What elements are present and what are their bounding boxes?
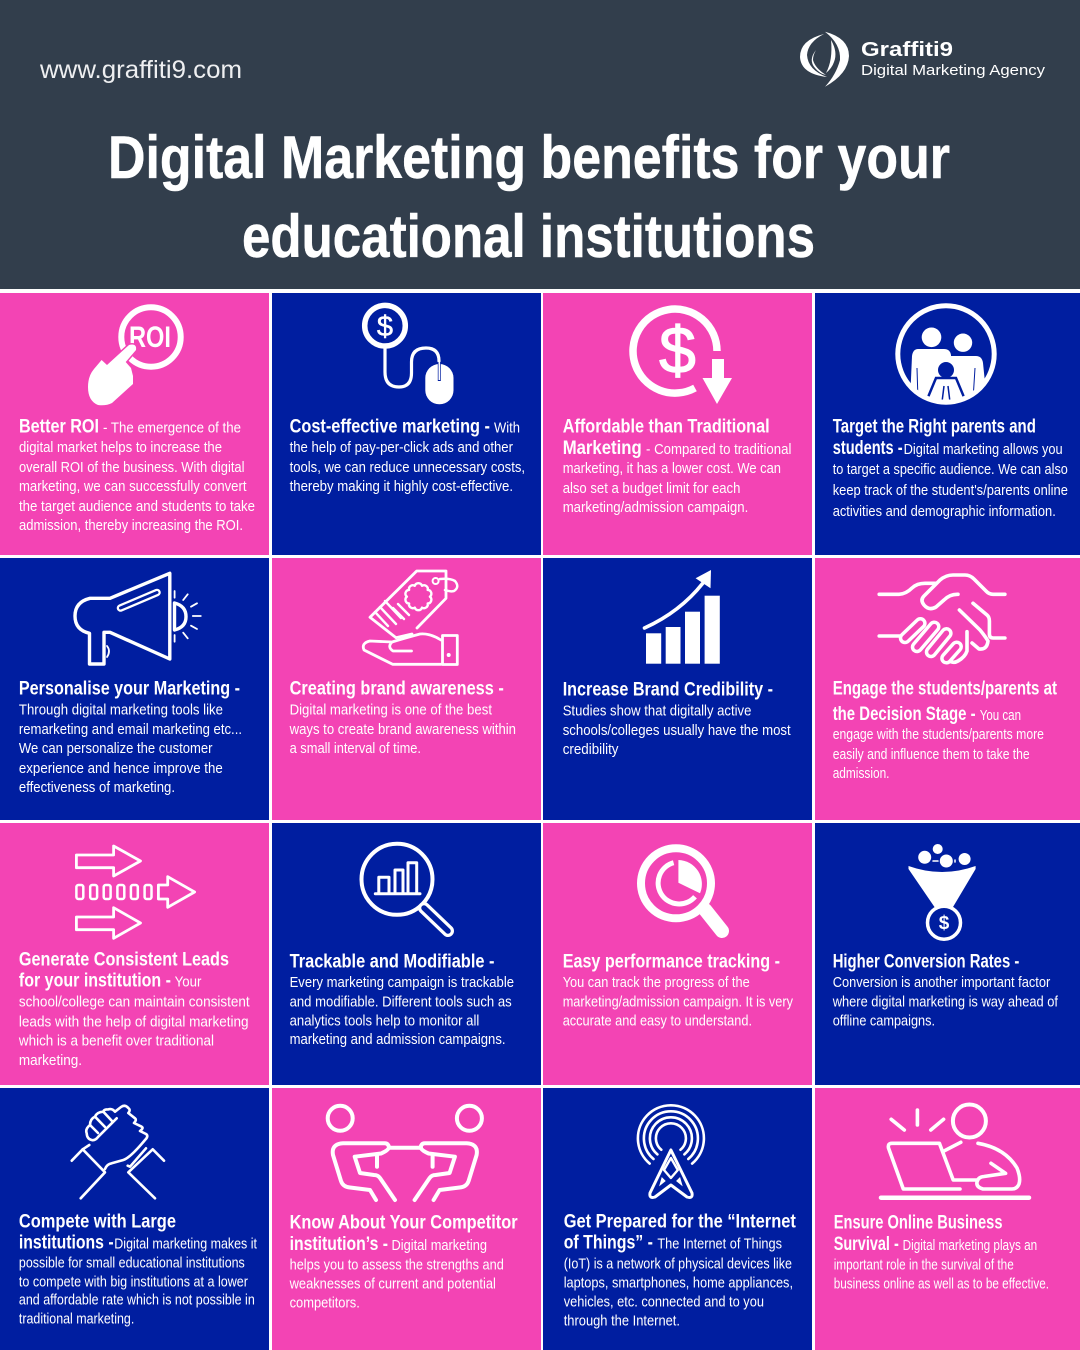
icon: funnel with dollar coin	[908, 844, 976, 939]
body text: Conversion is another important factor	[833, 974, 1050, 991]
heading: Easy performance tracking -	[563, 951, 780, 973]
panel: Easy performance tracking	[543, 823, 812, 1085]
panel: Creating brand awareness	[272, 558, 541, 820]
body text: to compete with big institutions at a lower	[19, 1274, 248, 1291]
icon: two people at table	[328, 1106, 482, 1200]
body text: Through digital marketing tools like	[19, 701, 223, 718]
body text	[563, 441, 791, 516]
body text: thereby making it highly cost-effective.	[290, 478, 513, 495]
icon: megaphone	[75, 573, 201, 664]
body text: You can track the progress of the	[563, 974, 750, 991]
icon: family in circle	[898, 306, 994, 402]
heading: Higher Conversion Rates -	[833, 951, 1019, 973]
icon: price tag on hand	[363, 571, 457, 664]
icon: dollar with down arrow: $	[659, 313, 696, 387]
body text	[833, 441, 1068, 520]
heading: Increase Brand Credibility -	[563, 679, 773, 701]
body text	[833, 707, 1044, 782]
heading	[563, 416, 770, 459]
icon: magnifier over bars	[362, 844, 448, 931]
body text: laptops, smartphones, home appliances,	[564, 1274, 793, 1291]
panel: Increase Brand Credibility	[543, 558, 812, 820]
body text: Digital marketing plays an	[903, 1237, 1037, 1254]
panel: Engage the students/parents	[815, 558, 1080, 820]
heading: Better ROI	[19, 416, 99, 438]
heading: institutions -	[19, 1231, 114, 1253]
icon: dollar coin and mouse: $	[377, 311, 393, 343]
title: educational institutions	[242, 203, 815, 270]
icon: dollar coin and mouse	[365, 305, 454, 404]
panel: Personalise your Marketing	[0, 558, 269, 820]
heading: Cost-effective marketing -	[290, 416, 490, 438]
header band	[0, 0, 1080, 289]
heading: Survival -	[834, 1233, 899, 1255]
icon: ROI click	[88, 307, 181, 405]
body text: - The emergence of the	[103, 420, 241, 436]
body text: school/college can maintain consistent	[19, 994, 250, 1011]
body text: ways to create brand awareness within	[289, 721, 516, 738]
body text: and modifiable. Different tools such as	[290, 994, 512, 1011]
body text	[18, 974, 250, 1069]
body text	[834, 1237, 1049, 1292]
body text: leads with the help of digital marketing	[19, 1014, 249, 1031]
body text	[19, 420, 255, 534]
panel: Ensure Online Business Survival	[815, 1088, 1080, 1350]
body text: remarketing and email marketing etc...	[19, 721, 242, 738]
body text	[19, 701, 242, 796]
heading: the Decision Stage -	[833, 703, 976, 725]
heading: institution’s -	[290, 1233, 388, 1255]
body text: marketing/admission campaign. It is very	[563, 994, 793, 1011]
body text: which is a benefit over traditional	[18, 1033, 214, 1050]
body text: admission, thereby increasing the ROI.	[19, 517, 243, 534]
body text	[19, 1235, 258, 1327]
body text	[563, 703, 791, 758]
body text: weaknesses of current and potential	[289, 1275, 496, 1292]
panel: Higher Conversion Rates	[815, 823, 1080, 1085]
body text: offline campaigns.	[833, 1013, 935, 1030]
body text: Digital marketing is one of the best	[290, 701, 493, 718]
body text: (IoT) is a network of physical devices like	[564, 1255, 792, 1272]
icon: ROI click: ROI	[129, 321, 171, 354]
body text: admission.	[833, 765, 890, 782]
body text	[289, 1237, 504, 1311]
body text: We can personalize the customer	[19, 740, 213, 757]
body text: experience and hence improve the	[19, 760, 223, 777]
logo: Graffiti9: Graffiti9	[861, 39, 953, 61]
body text: a small interval of time.	[290, 740, 421, 757]
heading	[19, 1211, 176, 1253]
icon: arm wrestling hands	[72, 1106, 164, 1198]
panel: Know About Your Competitor	[272, 1088, 541, 1350]
body text: Studies show that digitally active	[563, 703, 751, 720]
panel: Better ROI	[0, 293, 269, 555]
heading: of Things” -	[564, 1231, 653, 1253]
panel: Cost-effective marketing	[272, 293, 541, 555]
panel: Affordable than Traditional Marketing	[543, 293, 812, 555]
title	[108, 124, 950, 270]
body text: easily and influence them to take the	[833, 746, 1030, 763]
body text	[289, 701, 516, 757]
heading: Know About Your Competitor	[290, 1211, 518, 1233]
icon: dollar with down arrow	[633, 309, 732, 404]
body text: Every marketing campaign is trackable	[290, 974, 514, 991]
body text	[563, 974, 793, 1030]
body text: You can	[980, 707, 1021, 724]
heading	[290, 1211, 518, 1255]
icon: signal tower	[638, 1105, 704, 1198]
panel: Trackable and Modifiable	[272, 823, 541, 1085]
heading	[564, 1211, 796, 1253]
icon: magnifier over pie chart	[641, 848, 722, 931]
heading: Personalise your Marketing -	[19, 677, 240, 699]
body text: important role in the survival of the	[834, 1256, 1014, 1273]
heading	[834, 1211, 1003, 1255]
heading	[833, 677, 1057, 725]
body text: marketing.	[19, 1052, 82, 1069]
panel: Target the Right parents and students	[815, 293, 1080, 555]
body text: marketing/admission campaign.	[563, 499, 748, 516]
body text: digital market helps to increase the	[19, 439, 222, 456]
body text	[290, 974, 514, 1048]
body text: the target audience and students to take	[19, 498, 255, 515]
heading: Get Prepared for the “Internet	[564, 1211, 796, 1233]
icon: three arrows	[76, 846, 195, 938]
body text: With	[494, 420, 520, 436]
heading	[19, 949, 229, 992]
body text: marketing, we can successfully convert	[19, 478, 247, 495]
body text: accurate and easy to understand.	[563, 1013, 752, 1030]
body text: effectiveness of marketing.	[19, 779, 175, 796]
body text: Digital marketing makes it	[114, 1235, 258, 1252]
heading: for your institution -	[19, 970, 171, 992]
heading: Compete with Large	[19, 1211, 176, 1233]
body text: tools, we can reduce unnecessary costs,	[290, 459, 525, 476]
body text: analytics tools help to monitor all	[290, 1013, 479, 1030]
body text: also set a budget limit for each	[563, 480, 740, 497]
heading: Creating brand awareness -	[290, 677, 504, 699]
body text: Digital marketing	[392, 1237, 487, 1254]
body text: through the Internet.	[564, 1313, 680, 1330]
body text: credibility	[563, 741, 619, 758]
website url: www.graffiti9.com	[39, 56, 242, 84]
body text: and affordable rate which is not possible in	[19, 1291, 255, 1308]
body text: possible for small educational institutions	[19, 1255, 245, 1272]
body text: marketing and admission campaigns.	[290, 1031, 506, 1048]
icon: handshake	[879, 575, 1005, 662]
heading	[833, 416, 1036, 459]
icon: funnel with dollar coin: $	[939, 913, 950, 934]
body text: Your	[175, 974, 201, 991]
body text: traditional marketing.	[19, 1310, 134, 1327]
heading: Ensure Online Business	[834, 1211, 1003, 1233]
panel: Compete with Large institutions	[0, 1088, 269, 1350]
heading: Generate Consistent Leads	[19, 949, 229, 971]
heading: Marketing	[563, 437, 642, 459]
body text: competitors.	[290, 1294, 360, 1311]
panel: Internet of Things	[543, 1088, 812, 1350]
logo: Graffiti9	[800, 32, 1046, 87]
body text: schools/colleges usually have the most	[563, 722, 791, 739]
body text: helps you to assess the strengths and	[290, 1256, 504, 1273]
logo: Graffiti9: Digital Marketing Agency	[861, 62, 1046, 79]
body text	[564, 1235, 793, 1330]
body text: the help of pay-per-click ads and other	[290, 439, 513, 456]
panel: Generate Consistent Leads	[0, 823, 269, 1085]
body text	[290, 420, 525, 495]
body text: marketing, it has a lower cost. We can	[563, 460, 781, 477]
icon: person at laptop	[881, 1104, 1029, 1198]
body text: overall ROI of the business. With digital	[19, 459, 244, 476]
body text	[832, 974, 1059, 1030]
icon: rising bar chart	[644, 570, 720, 664]
title: Digital Marketing benefits for your	[108, 124, 950, 191]
heading: Trackable and Modifiable -	[290, 951, 494, 973]
body text: vehicles, etc. connected and to you	[564, 1294, 764, 1311]
heading: Affordable than Traditional	[563, 416, 770, 438]
body text: - Compared to traditional	[646, 441, 791, 458]
heading: students -	[833, 437, 903, 459]
body text: The Internet of Things	[657, 1235, 782, 1252]
